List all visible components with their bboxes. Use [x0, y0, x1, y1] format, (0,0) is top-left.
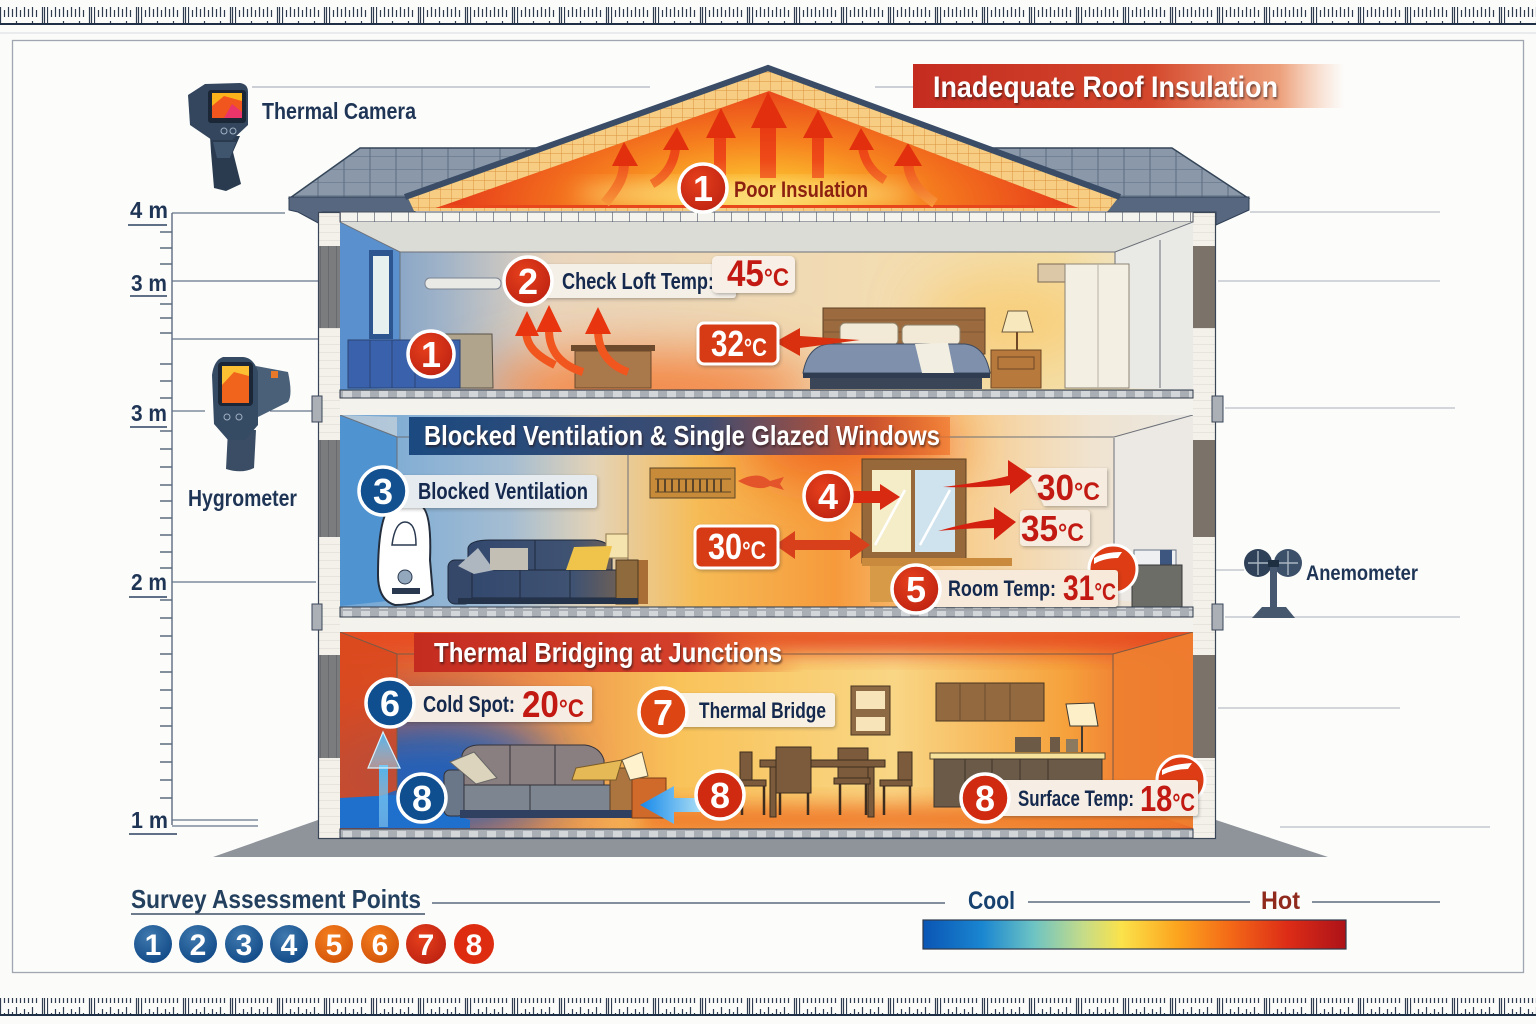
right wall — [1114, 426, 1156, 601]
icon: hygrometer — [212, 357, 290, 471]
arrow: to 32C — [775, 328, 860, 356]
title: thermal bridging: Thermal Bridging at Junctions — [434, 637, 782, 668]
callout: thermal bridge: Thermal Bridge — [699, 698, 826, 723]
title: roof insulation: Inadequate Roof Insulation — [933, 71, 1278, 104]
right guide lines — [1190, 212, 1490, 827]
arrow: heat out lower — [938, 507, 1016, 540]
side table — [1132, 550, 1182, 607]
arrow: cold leftwards — [640, 786, 700, 824]
label: poor insulation: Poor Insulation — [734, 177, 868, 202]
colour bar — [923, 920, 1346, 949]
callout: check loft temp: Check Loft Temp: — [562, 268, 714, 294]
legend: survey assessment points — [131, 884, 494, 964]
bottom ruler — [0, 998, 1536, 1016]
badge 3: 3 — [373, 471, 393, 512]
callout: room temp: Room Temp: — [948, 576, 1056, 601]
callout: room temp — [930, 569, 1118, 608]
left wall — [340, 222, 400, 390]
legend circles: 3 — [236, 929, 252, 962]
sofa — [448, 534, 648, 604]
window — [369, 250, 393, 339]
ceiling beam strip — [340, 212, 1193, 222]
humidifier — [378, 505, 433, 605]
height scale: 1 m — [131, 807, 168, 833]
height scale: 4 m — [130, 197, 168, 223]
badge 3 — [359, 467, 407, 515]
icon: anemometer — [1244, 549, 1302, 618]
label: hygrometer: Hygrometer — [188, 485, 297, 511]
house walls — [312, 212, 1223, 838]
legend circles: 4 — [281, 929, 298, 962]
floor strip — [340, 607, 1193, 617]
attic gable and insulation — [408, 70, 1118, 211]
cold floor — [340, 795, 470, 828]
legend circles: 1 — [145, 929, 161, 962]
arrow: cold rising — [368, 732, 400, 827]
arrow: heat out upper — [943, 460, 1032, 494]
arrow: into window — [852, 484, 900, 510]
attic heat fill — [436, 91, 1078, 208]
nightstand and lamp — [991, 311, 1041, 388]
legend circles: 2 — [190, 929, 206, 962]
blue cabinet — [348, 334, 493, 388]
bed — [803, 308, 990, 389]
right wall — [1113, 632, 1193, 828]
panel: middle floor — [340, 413, 1193, 617]
badge 7 — [639, 688, 687, 736]
side table — [622, 752, 666, 818]
callout: 30C left: 30°C — [708, 526, 766, 567]
floor strip — [340, 829, 1193, 838]
callout: 30C right: 30°C — [1037, 467, 1100, 508]
hidden red marker — [1089, 545, 1137, 593]
badge 8 blue — [398, 774, 446, 822]
legend circles: 6 — [372, 929, 388, 962]
double arrow — [775, 531, 870, 559]
legend heading: Survey Assessment Points — [131, 884, 421, 914]
temperature 45: 45°C — [727, 253, 789, 294]
callout: surface temp — [995, 778, 1198, 819]
callout: room temp: 31°C — [1063, 569, 1116, 608]
height scale: 2 m — [131, 569, 167, 595]
wardrobe — [1038, 264, 1129, 388]
roof: side hips — [289, 148, 1249, 225]
callout: cold spot — [400, 684, 592, 725]
vent — [650, 468, 735, 498]
desk — [571, 345, 655, 388]
warm glow — [480, 275, 1100, 426]
panel: attic — [405, 68, 1120, 211]
callout: 32C: 32°C — [711, 323, 767, 364]
legend: cool to hot scale — [923, 887, 1346, 949]
callout: cold spot: Cold Spot: — [423, 691, 515, 717]
airflow mark — [738, 476, 784, 490]
badge 4: 4 — [818, 476, 838, 517]
legend circles — [134, 924, 494, 964]
badge 6 — [366, 679, 414, 727]
badge 2: 2 — [518, 261, 538, 302]
ceiling — [340, 222, 1193, 252]
callout: thermal bridge — [675, 693, 835, 727]
badge 1 attic — [679, 164, 727, 212]
badge 5 — [892, 565, 940, 613]
legend circles: 5 — [326, 929, 342, 962]
badge 1 room: 1 — [421, 334, 441, 375]
kitchen counter — [930, 737, 1105, 807]
badge 8 centre — [696, 771, 744, 819]
badge 1 attic: 1 — [693, 168, 713, 209]
hot zone glow — [740, 413, 960, 477]
window — [851, 686, 890, 735]
cool label: Cool — [968, 887, 1015, 915]
window — [862, 459, 1012, 602]
lamp — [1066, 703, 1098, 752]
callout: blocked ventilation — [395, 475, 597, 508]
title: blocked ventilation: Blocked Ventilation & Single Glazed Windows — [424, 420, 940, 451]
cold zone — [305, 715, 555, 835]
label: thermal camera: Thermal Camera — [262, 98, 416, 124]
panel: upper floor bedroom — [340, 222, 1194, 398]
callout: 35C: 35°C — [1021, 508, 1084, 549]
sofa — [444, 745, 632, 818]
ground — [213, 820, 1328, 857]
wall cabinet — [936, 683, 1044, 721]
badge 4 — [804, 472, 852, 520]
badge 1 room — [408, 331, 454, 377]
hidden red marker — [1157, 756, 1205, 804]
height scale: 3 m — [131, 400, 167, 426]
badge 8 right: 8 — [975, 778, 995, 819]
heat glow — [430, 92, 1080, 209]
badge 8 right — [961, 774, 1009, 822]
legend circles: 7 — [418, 929, 434, 962]
badge 5: 5 — [906, 569, 926, 610]
callout: surface temp: 18°C — [1140, 778, 1195, 819]
air conditioner — [425, 278, 501, 289]
left wall — [340, 632, 397, 810]
roof ridge outline — [405, 68, 1120, 197]
ceiling band — [340, 415, 397, 437]
badge 7: 7 — [653, 692, 673, 733]
badge 6: 6 — [380, 683, 400, 724]
top ruler — [0, 7, 1536, 25]
callout: check loft temp — [540, 253, 795, 298]
badge 8 centre: 8 — [710, 775, 730, 816]
floor strip — [340, 390, 1193, 398]
callout: blocked ventilation: Blocked Ventilation — [418, 478, 588, 504]
label: anemometer: Anemometer — [1306, 562, 1418, 585]
title: roof insulation — [913, 64, 1345, 108]
panel: ground floor — [305, 622, 1193, 838]
badge 8 blue: 8 — [412, 778, 432, 819]
callout: cold spot: 20°C — [522, 684, 584, 725]
callout: surface temp: Surface Temp: — [1018, 786, 1134, 811]
badge 2 — [504, 257, 552, 305]
arrows: loft rising heat — [515, 305, 628, 372]
legend circles: 8 — [466, 929, 482, 962]
height scale — [128, 197, 318, 834]
heat band at ceiling — [340, 622, 1193, 652]
height scale: 3 m — [131, 270, 167, 296]
left wall — [340, 415, 397, 606]
icon: thermal camera — [188, 83, 248, 191]
hot label: Hot — [1261, 887, 1301, 915]
dining table — [738, 747, 912, 817]
heat arrows — [605, 120, 935, 203]
right wall — [1115, 222, 1193, 390]
warm floor band — [640, 805, 1193, 835]
